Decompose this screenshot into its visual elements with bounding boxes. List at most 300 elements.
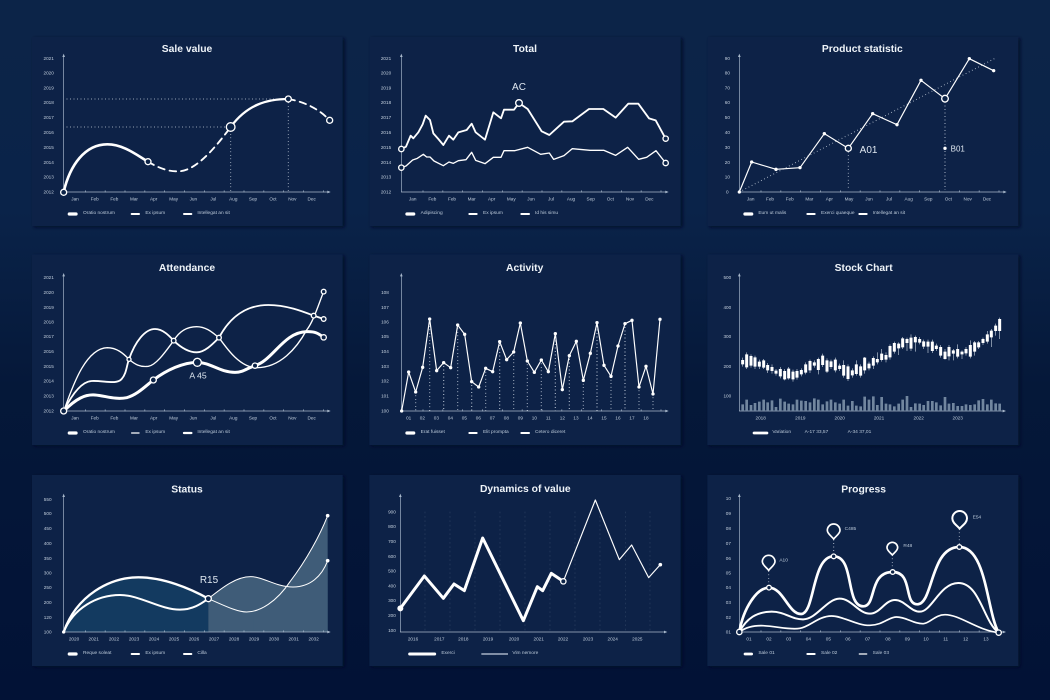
x axis labels: 2020: [69, 636, 80, 641]
y axis labels: 250: [44, 585, 52, 590]
dotted trend and guides: [739, 58, 995, 192]
y axis labels: 2015: [43, 145, 54, 150]
line: thick series: [400, 538, 563, 621]
legend: Intellegat an sit: [197, 210, 230, 216]
legend: Reque soleat: [83, 650, 112, 656]
legend: Cilla: [197, 650, 207, 656]
x axis labels: 17: [629, 415, 635, 420]
y axis labels: 2015: [381, 145, 392, 150]
axes: [400, 54, 669, 193]
axes: [400, 273, 669, 412]
y axis labels: 300: [44, 570, 52, 575]
curve: low series: [739, 615, 999, 633]
x axis labels: 2032: [308, 636, 319, 641]
x axis labels: 12: [963, 636, 969, 641]
y axis labels: [725, 56, 730, 194]
y axis labels: 400: [723, 305, 732, 310]
y axis labels: 2013: [43, 393, 54, 398]
legend: Cetero diceret: [535, 429, 566, 435]
x axis labels: Feb: [91, 196, 99, 201]
data markers: [62, 514, 329, 634]
x axis labels: 07: [490, 415, 495, 420]
x axis labels: Mar: [468, 196, 476, 201]
x axis labels: 2018: [458, 636, 469, 641]
legend: Exerci quaeque: [821, 210, 855, 216]
legend: Ex ipsum: [145, 429, 165, 435]
x axis labels: Jul: [886, 196, 892, 201]
y axis labels: 2019: [43, 85, 54, 90]
legend: [407, 429, 566, 435]
y axis labels: 2016: [43, 130, 54, 135]
x axis labels: [746, 636, 989, 641]
y axis labels: [388, 509, 396, 633]
x axis labels: 04: [448, 415, 453, 420]
line: thin series: [563, 500, 660, 581]
y axis labels: 106: [381, 319, 389, 324]
x axis labels: 07: [865, 636, 871, 641]
pin: E54: [952, 511, 982, 529]
y axis labels: 06: [726, 556, 731, 561]
panel: attendance: [32, 254, 343, 445]
grid lines: [425, 512, 650, 632]
y axis labels: 100: [44, 629, 52, 634]
title: status: Status: [171, 484, 203, 495]
x axis labels: 2025: [169, 636, 180, 641]
title: sale value: Sale value: [162, 44, 213, 55]
panel: sale value: [32, 37, 343, 226]
candlestick bodies: [743, 319, 1000, 379]
legend: Id his simu: [535, 210, 558, 216]
legend: Sale 02: [821, 650, 838, 656]
curve: thick series: [739, 547, 999, 633]
y axis labels: 07: [726, 541, 731, 546]
x axis labels: 11: [943, 636, 948, 641]
callout R15: R15: [200, 575, 219, 586]
x axis labels: [71, 196, 316, 201]
x axis labels: Jan: [71, 415, 79, 420]
y axis labels: 04: [726, 585, 731, 590]
data markers: [61, 96, 333, 195]
x axis labels: 10: [532, 415, 537, 420]
x axis labels: 16: [615, 415, 621, 420]
x axis labels: 15: [601, 415, 607, 420]
curves: left thick: [64, 577, 208, 632]
title: dynamics of value: Dynamics of value: [480, 484, 571, 495]
y axis labels: 200: [723, 364, 732, 369]
x axis labels: Jun: [190, 196, 197, 201]
y axis labels: 105: [381, 334, 389, 339]
y axis labels: 500: [388, 568, 396, 573]
legend: [410, 650, 539, 656]
y axis labels: 2019: [381, 85, 392, 90]
x axis labels: 2023: [583, 636, 594, 641]
x axis labels: Dec: [308, 196, 316, 201]
x axis labels: 11: [546, 415, 551, 420]
legend: Intellegat an sit: [197, 429, 230, 435]
x axis labels: 2021: [874, 415, 885, 420]
y axis labels: 70: [725, 85, 730, 90]
x axis labels: Nov: [288, 415, 297, 420]
x axis labels: May: [845, 196, 854, 201]
legend: A-34 37,01: [848, 429, 872, 435]
legend: [754, 429, 872, 435]
x axis labels: Oct: [269, 415, 277, 420]
legend: Vim nemore: [512, 650, 539, 656]
x axis labels: Apr: [826, 196, 833, 201]
y axis labels: [723, 275, 732, 398]
legend: [745, 210, 906, 216]
y axis labels: 900: [388, 509, 396, 514]
callout AC: AC: [512, 82, 526, 93]
pin: E54: E54: [973, 514, 982, 520]
pin: A10: A10: [779, 557, 788, 563]
y axis labels: 2016: [381, 130, 392, 135]
x axis labels: 2022: [558, 636, 569, 641]
x axis labels: [409, 196, 654, 201]
x axis labels: Apr: [150, 196, 158, 201]
y axis labels: 300: [388, 598, 396, 603]
x axis labels: Mar: [130, 415, 138, 420]
x axis labels: 14: [587, 415, 593, 420]
x axis labels: Aug: [905, 196, 913, 201]
x axis labels: Jan: [747, 196, 755, 201]
legend: Eum ut malis: [758, 210, 787, 216]
y axis labels: 05: [726, 570, 731, 575]
y axis labels: [43, 275, 54, 413]
curve: thin series: [64, 292, 324, 411]
volume bars: [743, 396, 1000, 411]
legend: [69, 650, 207, 656]
y axis labels: 2014: [381, 160, 392, 165]
x axis labels: 03: [434, 415, 439, 420]
x axis labels: Jul: [210, 415, 216, 420]
legend: Adipiscing: [421, 210, 443, 216]
x axis labels: 2020: [509, 636, 520, 641]
x axis labels: 2019: [795, 415, 806, 420]
x axis labels: 09: [518, 415, 523, 420]
y axis labels: 2015: [43, 364, 54, 369]
candlestick wicks: [743, 318, 1000, 382]
callout A01: A01: [860, 145, 878, 156]
panel: total: [369, 37, 681, 226]
y axis labels: 500: [723, 275, 732, 280]
legend: Sale 01: [758, 650, 775, 656]
y axis labels: 2018: [381, 100, 392, 105]
x axis labels: [69, 636, 319, 641]
x axis labels: 2020: [834, 415, 845, 420]
x axis labels: 02: [766, 636, 772, 641]
x axis labels: Mar: [805, 196, 814, 201]
x axis labels: Sep: [924, 196, 933, 201]
x axis labels: [406, 415, 649, 420]
area: left region: [64, 577, 208, 632]
x axis labels: 2031: [288, 636, 299, 641]
y axis labels: 400: [388, 583, 396, 588]
y axis labels: 02: [726, 615, 731, 620]
x axis labels: Apr: [488, 196, 496, 201]
x axis labels: 01: [406, 415, 412, 420]
pin: C485: [827, 524, 857, 539]
line chart: activity: [402, 319, 660, 411]
curve: middle series: [739, 583, 999, 633]
legend: Sale 03: [873, 650, 889, 656]
x axis labels: Oct: [269, 196, 277, 201]
x axis labels: 2016: [408, 636, 419, 641]
pin: R48: R48: [903, 543, 913, 549]
title: product statistic: Product statistic: [822, 44, 903, 55]
y axis labels: 120: [44, 615, 52, 620]
x axis labels: Jun: [190, 415, 197, 420]
x axis labels: [747, 196, 992, 201]
y axis labels: 2013: [381, 174, 392, 179]
panel: activity: [369, 254, 681, 445]
x axis labels: Apr: [150, 415, 158, 420]
x axis labels: Feb: [786, 196, 794, 201]
x axis labels: [755, 415, 963, 420]
axes: [738, 273, 1006, 412]
dotted droplines: [416, 319, 653, 411]
y axis labels: 2021: [43, 275, 54, 280]
title: total: Total: [513, 44, 537, 55]
x axis labels: May: [169, 415, 179, 420]
x axis labels: 05: [462, 415, 467, 420]
y axis labels: [44, 497, 52, 634]
y axis labels: 107: [381, 305, 389, 310]
legend: Intellegat an sit: [873, 210, 906, 216]
x axis labels: 2024: [149, 636, 160, 641]
x axis labels: Oct: [607, 196, 615, 201]
dotted pin stems: [769, 529, 959, 588]
y axis labels: 50: [725, 115, 730, 120]
y axis labels: 103: [381, 364, 389, 369]
y axis labels: [726, 496, 731, 634]
y axis labels: 2020: [381, 70, 392, 75]
x axis labels: 2021: [88, 636, 99, 641]
legend: Oratio nostrum: [83, 210, 115, 216]
legend: [69, 210, 230, 216]
x axis labels: 2022: [109, 636, 120, 641]
axes: [738, 54, 1007, 193]
x axis labels: 2027: [209, 636, 220, 641]
title: activity: Activity: [506, 263, 544, 274]
line chart: sale value: [64, 99, 330, 192]
panel: stock chart: [707, 254, 1018, 445]
x axis labels: Mar: [130, 196, 138, 201]
x axis labels: [408, 636, 643, 641]
x axis labels: 2023: [129, 636, 140, 641]
y axis labels: 2017: [43, 334, 54, 339]
y axis labels: 300: [723, 334, 732, 339]
x axis labels: 08: [885, 636, 891, 641]
x axis labels: Jun: [865, 196, 873, 201]
x axis labels: 2017: [434, 636, 445, 641]
y axis labels: 08: [726, 526, 731, 531]
y axis labels: 400: [44, 541, 52, 546]
x axis labels: Jan: [71, 196, 79, 201]
legend: Ex ipsum: [145, 210, 165, 216]
x axis labels: 2025: [632, 636, 643, 641]
x axis labels: Dec: [645, 196, 654, 201]
axes: [399, 494, 667, 633]
y axis labels: 104: [381, 349, 389, 354]
dotted guides: [67, 99, 288, 192]
x axis labels: 2030: [269, 636, 280, 641]
y axis labels: 2017: [381, 115, 392, 120]
y axis labels: 2012: [43, 189, 54, 194]
y axis labels: 550: [44, 497, 52, 502]
x axis labels: 04: [806, 636, 811, 641]
y axis labels: 09: [726, 511, 731, 516]
x axis labels: Aug: [229, 415, 238, 420]
axes: [62, 273, 331, 412]
y axis labels: 450: [44, 526, 52, 531]
x axis labels: Feb: [766, 196, 774, 201]
y axis labels: 90: [725, 56, 730, 61]
panel: product statistic: [707, 37, 1018, 226]
pin: R48: [887, 542, 913, 555]
panel: dynamics of value: [369, 475, 681, 666]
x axis labels: Feb: [110, 196, 119, 201]
x axis labels: Aug: [229, 196, 238, 201]
x axis labels: 2019: [483, 636, 494, 641]
y axis labels: 2020: [43, 290, 54, 295]
legend: [69, 429, 230, 435]
y axis labels: 2014: [43, 160, 54, 165]
x axis labels: 06: [845, 636, 851, 641]
x axis labels: May: [507, 196, 516, 201]
y axis labels: [43, 56, 54, 194]
title: progress: Progress: [841, 484, 886, 495]
y axis labels: 101: [381, 393, 389, 398]
y axis labels: 2019: [43, 305, 54, 310]
panel: status: [32, 475, 343, 666]
data markers: [397, 563, 662, 611]
y axis labels: 102: [381, 378, 389, 383]
y axis labels: 200: [388, 613, 396, 618]
y axis labels: 100: [381, 408, 389, 413]
data markers: [399, 100, 668, 170]
x axis labels: 2023: [952, 415, 963, 420]
x axis labels: Jul: [210, 196, 216, 201]
legend: [745, 650, 889, 656]
legend: Oratio nostrum: [83, 429, 115, 435]
x axis labels: 2026: [189, 636, 200, 641]
x axis labels: Jan: [409, 196, 417, 201]
x axis labels: 05: [826, 636, 831, 641]
x axis labels: 06: [476, 415, 481, 420]
data markers: [737, 545, 1001, 635]
y axis labels: 2018: [43, 319, 54, 324]
panel: progress: [707, 475, 1018, 666]
title: attendance: Attendance: [159, 263, 215, 274]
x axis labels: 12: [560, 415, 565, 420]
curve: thick series: [64, 332, 324, 411]
x axis labels: Dec: [983, 196, 992, 201]
x axis labels: 10: [923, 636, 929, 641]
x axis labels: Nov: [626, 196, 635, 201]
line: upper series: [401, 103, 666, 149]
y axis labels: 700: [388, 539, 396, 544]
x axis labels: Feb: [428, 196, 437, 201]
y axis labels: 03: [726, 600, 731, 605]
y axis labels: 10: [726, 496, 731, 501]
y axis labels: [381, 290, 389, 413]
x axis labels: Feb: [110, 415, 119, 420]
x axis labels: Jun: [527, 196, 535, 201]
title: stock chart: Stock Chart: [835, 263, 893, 274]
y axis labels: 2016: [43, 349, 54, 354]
data markers: [61, 289, 326, 414]
x axis labels: 03: [786, 636, 792, 641]
y axis labels: 10: [725, 174, 730, 179]
y axis labels: 600: [388, 554, 396, 559]
callout B01: B01: [951, 144, 965, 153]
x axis labels: 2028: [229, 636, 240, 641]
y axis labels: 800: [388, 524, 396, 529]
legend: Variation: [772, 429, 791, 435]
x axis labels: 01: [746, 636, 752, 641]
axes: [738, 494, 1006, 633]
callout A 45: A 45: [189, 370, 207, 380]
y axis labels: 350: [44, 556, 52, 561]
y axis labels: 2021: [381, 56, 392, 61]
y axis labels: 40: [725, 130, 730, 135]
x axis labels: 13: [983, 636, 989, 641]
legend: Exerci: [441, 650, 455, 656]
y axis labels: 60: [725, 100, 730, 105]
legend: Erat fuisset: [421, 429, 445, 435]
x axis labels: 2021: [533, 636, 544, 641]
y axis labels: 500: [44, 511, 52, 516]
line: lower series: [401, 147, 666, 168]
x axis labels: 2018: [755, 415, 766, 420]
x axis labels: Nov: [964, 196, 972, 201]
y axis labels: 2012: [381, 189, 392, 194]
x axis labels: Jul: [548, 196, 554, 201]
legend: Ex ipsum: [483, 210, 503, 216]
x axis labels: 02: [420, 415, 425, 420]
y axis labels: 100: [723, 393, 732, 398]
x axis labels: Aug: [567, 196, 576, 201]
y axis labels: 108: [381, 290, 389, 295]
x axis labels: Nov: [288, 196, 297, 201]
y axis labels: 100: [388, 628, 396, 633]
data markers: [738, 57, 995, 194]
y axis labels: 2013: [43, 174, 54, 179]
y axis labels: 2014: [43, 378, 54, 383]
x axis labels: 08: [504, 415, 509, 420]
x axis labels: Sep: [249, 196, 258, 201]
y axis labels: 30: [725, 145, 730, 150]
axes: [62, 54, 331, 193]
x axis labels: 09: [905, 636, 910, 641]
y axis labels: [381, 56, 392, 194]
x axis labels: Feb: [448, 196, 456, 201]
x axis labels: Sep: [587, 196, 595, 201]
y axis labels: 2018: [43, 100, 54, 105]
y axis labels: 01: [726, 629, 731, 634]
x axis labels: Feb: [91, 415, 99, 420]
x axis labels: Sep: [249, 415, 258, 420]
legend: A-17 33,57: [805, 429, 829, 435]
y axis labels: 200: [44, 600, 52, 605]
x axis labels: Dec: [308, 415, 316, 420]
curves: right thin: [208, 516, 328, 612]
x axis labels: [71, 415, 316, 420]
y axis labels: 20: [725, 160, 730, 165]
legend: [407, 210, 558, 216]
data markers: [400, 317, 662, 413]
